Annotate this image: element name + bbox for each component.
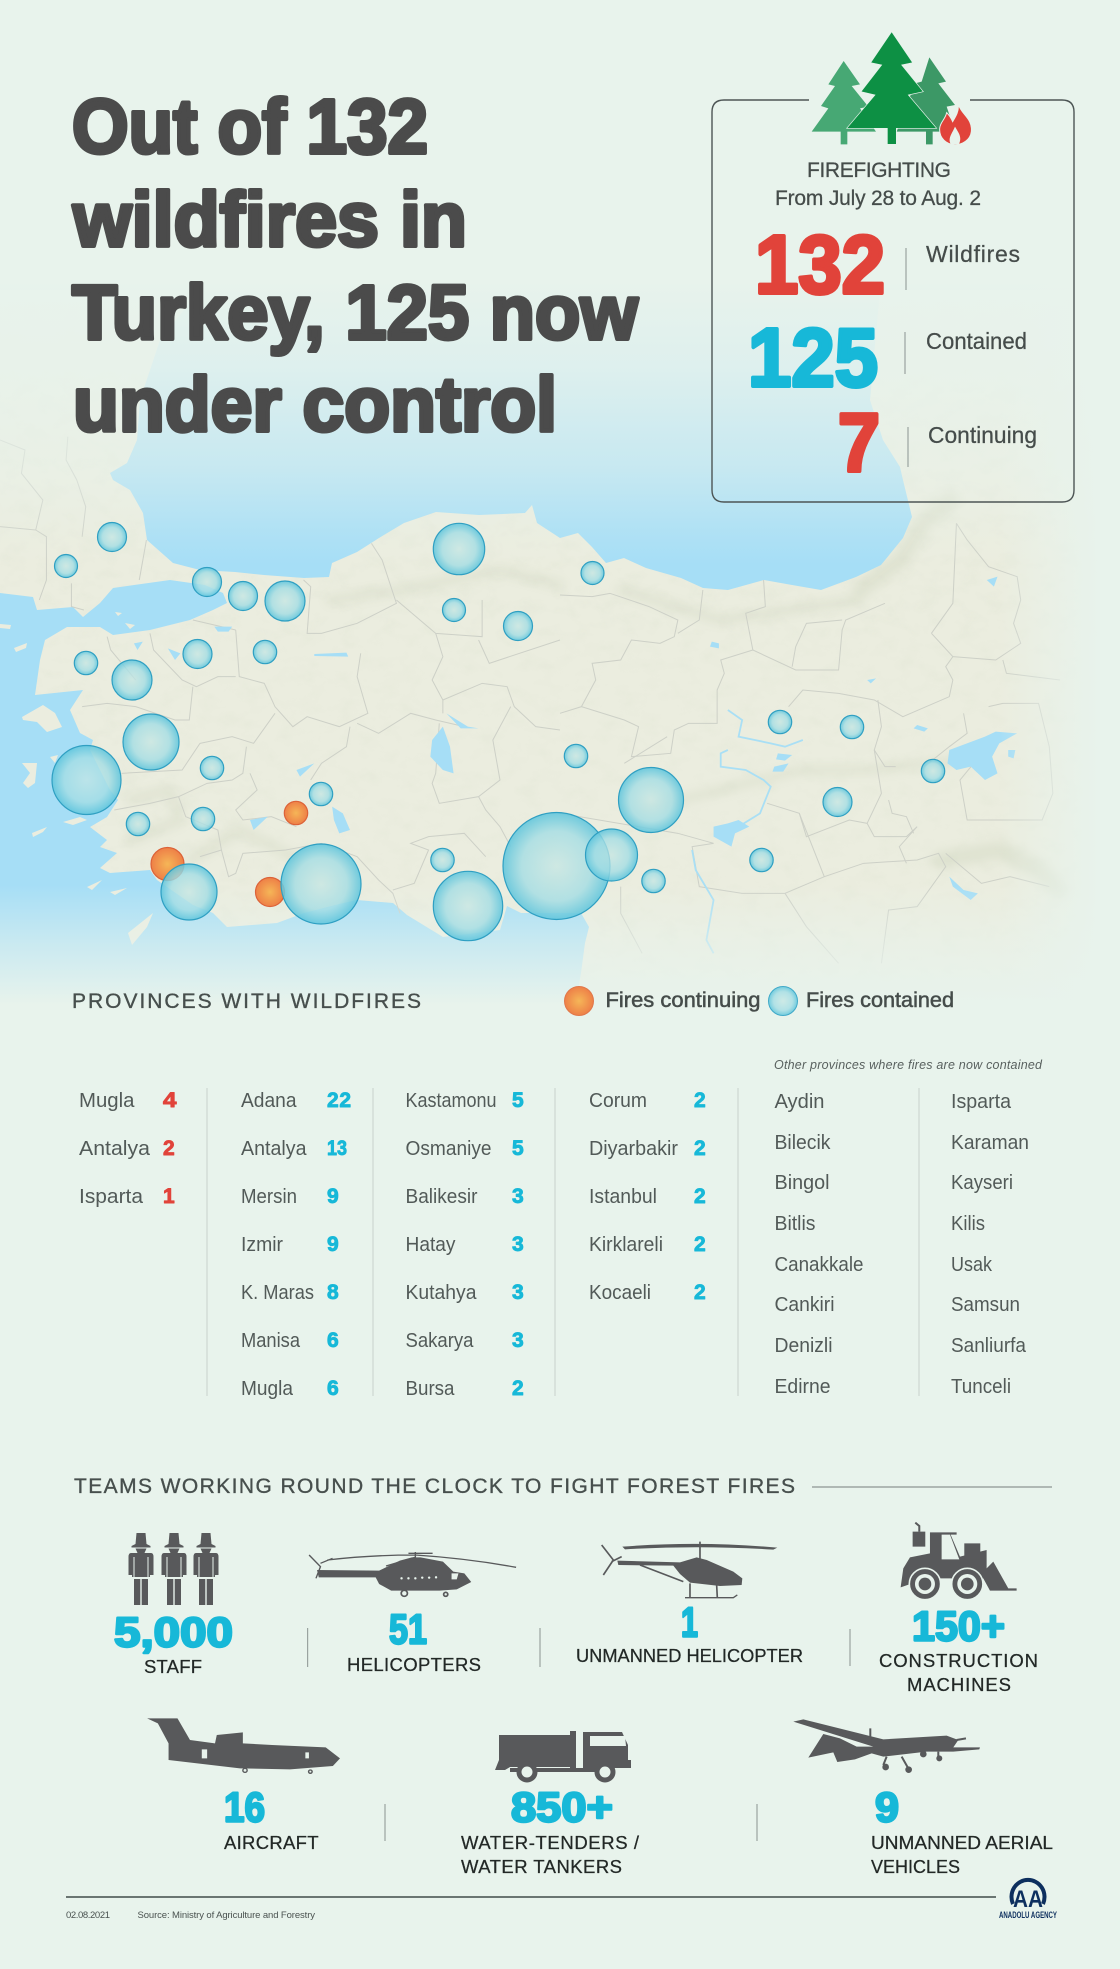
- list: contained, column one: Mugla: [241, 1377, 294, 1400]
- list: other provinces, left: Canakkale: [774, 1253, 864, 1276]
- stat: construction machines: 150+: [912, 1602, 1005, 1650]
- list: contained, column two: Bursa: [406, 1377, 455, 1400]
- title: wildfires in: [72, 177, 467, 263]
- list: contained, column two: 5: [512, 1137, 524, 1160]
- icon: firefighters: [128, 1533, 218, 1605]
- note: other provinces: Other provinces where fires are now contained: [774, 1058, 1043, 1072]
- list: fires continuing by province: [79, 1089, 177, 1208]
- list: contained, column three: Kocaeli: [589, 1281, 651, 1304]
- stat: aircraft: AIRCRAFT: [224, 1832, 319, 1853]
- list: contained, column one: 8: [327, 1281, 339, 1304]
- stat: unmanned helicopter: UNMANNED HELICOPTER: [576, 1645, 803, 1666]
- stat: 132 wildfires: Wildfires: [926, 241, 1020, 267]
- list: other provinces, right: Sanliurfa: [951, 1334, 1027, 1357]
- terrain texture: [127, 499, 1041, 874]
- icon: water tanker truck: [495, 1731, 631, 1780]
- list: contained, column one: 9: [327, 1185, 339, 1208]
- list: contained, column two: Osmaniye: [406, 1137, 492, 1160]
- list: other provinces, left: Denizli: [774, 1334, 832, 1357]
- list: contained, column three: 2: [694, 1233, 706, 1256]
- list: other provinces, right: Kilis: [951, 1212, 985, 1235]
- stat: water tankers: WATER TANKERS: [461, 1856, 622, 1877]
- stat: water tankers: 850+: [511, 1784, 613, 1830]
- stat: 7 continuing: Continuing: [928, 422, 1037, 448]
- stat: 125 contained: [748, 311, 1027, 404]
- list: contained, column two: 2: [512, 1377, 524, 1400]
- western province borders: [0, 437, 560, 913]
- list: contained, column three: Kirklareli: [589, 1233, 663, 1256]
- icon: helicopter: [309, 1552, 516, 1596]
- list: contained, column one: 22: [327, 1089, 351, 1112]
- list: contained, column two: 3: [512, 1329, 524, 1352]
- logo: Anadolu Agency: ANADOLU AGENCY: [999, 1910, 1057, 1921]
- list: contained, column two: Balikesir: [406, 1185, 478, 1208]
- list: contained, column one: Manisa: [241, 1329, 301, 1352]
- sea: [0, 280, 1120, 1010]
- stat: staff: STAFF: [144, 1656, 202, 1677]
- list: contained, column two: [406, 1089, 524, 1400]
- list: contained, column two: Kutahya: [406, 1281, 477, 1304]
- list: other provinces, left: Edirne: [774, 1375, 830, 1398]
- list: contained, column three: 2: [694, 1281, 706, 1304]
- list: fires continuing by province: Isparta: [79, 1185, 144, 1208]
- panel: firefighting summary: [712, 32, 1074, 502]
- list: other provinces, right: Samsun: [951, 1293, 1020, 1316]
- panel heading: FIREFIGHTING: [807, 159, 951, 182]
- icon: drone: [793, 1719, 980, 1773]
- eastern province borders: [560, 523, 1060, 963]
- legend: Fires continuing: [606, 989, 760, 1012]
- stat: unmanned aerial vehicles: VEHICLES: [871, 1856, 960, 1877]
- list: contained, column two: Sakarya: [406, 1329, 474, 1352]
- list: fires continuing by province: Antalya: [79, 1137, 151, 1160]
- orange bubbles: fires continuing: [151, 801, 308, 906]
- stat: 125 contained: 125: [748, 311, 878, 404]
- list: contained, column three: Istanbul: [589, 1185, 657, 1208]
- list: contained, column three: [589, 1089, 706, 1304]
- stat: 125 contained: Contained: [926, 328, 1027, 354]
- panel date range: From July 28 to Aug. 2: [775, 187, 981, 210]
- icon: trees with flame: [812, 32, 971, 145]
- title: Out of 132: [72, 84, 428, 170]
- list: other provinces, right: [951, 1090, 1029, 1398]
- list: other provinces, left: [774, 1090, 864, 1398]
- list: contained, column two: 3: [512, 1281, 524, 1304]
- list: fires continuing by province: 4: [163, 1089, 177, 1112]
- list: contained, column one: Mersin: [241, 1185, 297, 1208]
- stat: helicopters: 51: [389, 1606, 427, 1652]
- footer source: Source: Ministry of Agriculture and Forestry: [138, 1910, 315, 1921]
- stat: unmanned helicopter: 1: [681, 1598, 698, 1646]
- list: contained, column one: Antalya: [241, 1137, 307, 1160]
- list: contained, column three: Corum: [589, 1089, 647, 1112]
- list: contained, column two: Kastamonu: [406, 1089, 496, 1112]
- title: [72, 84, 639, 448]
- stat: helicopters: [309, 1552, 516, 1675]
- stat: construction machines: MACHINES: [907, 1674, 1011, 1695]
- page fade overlays: [0, 280, 1120, 1010]
- list: contained, column two: 3: [512, 1233, 524, 1256]
- stat: staff: [114, 1533, 233, 1677]
- list: contained, column three: 2: [694, 1089, 706, 1112]
- list: contained, column three: 2: [694, 1137, 706, 1160]
- list: other provinces, right: Tunceli: [951, 1375, 1011, 1398]
- icon: aircraft: [147, 1718, 340, 1773]
- legend: Fires contained: [806, 989, 954, 1012]
- list: other provinces, left: Bilecik: [774, 1131, 831, 1154]
- legend: [564, 986, 954, 1016]
- stat: 7 continuing: 7: [838, 396, 880, 489]
- stat: aircraft: 16: [224, 1784, 265, 1830]
- stat: 132 wildfires: 132: [755, 218, 885, 311]
- list: contained, column one: K. Maras: [241, 1281, 314, 1304]
- list: other provinces, left: Bingol: [774, 1171, 830, 1194]
- stat: aircraft: [147, 1718, 340, 1853]
- icon: wheel loader: [901, 1523, 1017, 1600]
- list: fires continuing by province: 1: [163, 1185, 175, 1208]
- landmass: [0, 290, 1120, 1008]
- stat: unmanned aerial vehicles: UNMANNED AERIAL: [871, 1832, 1053, 1853]
- list: contained, column three: Diyarbakir: [589, 1137, 678, 1160]
- stat: construction machines: CONSTRUCTION: [879, 1650, 1038, 1671]
- icon: unmanned helicopter: [602, 1542, 777, 1598]
- list: contained, column one: 9: [327, 1233, 339, 1256]
- list: contained, column three: 2: [694, 1185, 706, 1208]
- title: Turkey, 125 now: [72, 270, 639, 356]
- footer rule: [66, 1896, 996, 1898]
- heading: teams: TEAMS WORKING ROUND THE CLOCK TO FIGHT FOREST FIRES: [74, 1475, 795, 1498]
- stat: water tankers: [461, 1731, 640, 1877]
- list: contained, column two: 3: [512, 1185, 524, 1208]
- list: fires continuing by province: 2: [163, 1137, 175, 1160]
- stat: 132 wildfires: [755, 218, 1020, 311]
- list: other provinces, left: Cankiri: [774, 1293, 834, 1316]
- list: contained, column two: 5: [512, 1089, 524, 1112]
- heading: provinces with wildfires: PROVINCES WITH WILDFIRES: [72, 990, 421, 1013]
- stat: construction machines: [879, 1523, 1038, 1695]
- panel outline: [712, 100, 1074, 502]
- list: other provinces, left: Aydin: [774, 1090, 824, 1113]
- list: contained, column one: 6: [327, 1377, 339, 1400]
- list: contained, column one: Adana: [241, 1089, 297, 1112]
- list: other provinces, right: Isparta: [951, 1090, 1012, 1113]
- list dividers: [207, 1088, 919, 1396]
- list: contained, column one: 13: [327, 1137, 347, 1160]
- list: contained, column one: [241, 1089, 351, 1400]
- stat: unmanned aerial vehicles: [793, 1719, 1053, 1877]
- list: contained, column one: 6: [327, 1329, 339, 1352]
- list: contained, column two: Hatay: [406, 1233, 456, 1256]
- list: other provinces, right: Usak: [951, 1253, 993, 1276]
- list: other provinces, right: Karaman: [951, 1131, 1029, 1154]
- list: other provinces, right: Kayseri: [951, 1171, 1013, 1194]
- list: other provinces, left: Bitlis: [774, 1212, 816, 1235]
- map of Turkey with wildfire bubbles: [0, 350, 1065, 988]
- list: fires continuing by province: Mugla: [79, 1089, 135, 1112]
- stat: 7 continuing: [838, 396, 1037, 489]
- stat: helicopters: HELICOPTERS: [347, 1654, 481, 1675]
- stat: unmanned helicopter: [576, 1542, 803, 1666]
- logo: Anadolu Agency: [999, 1880, 1057, 1921]
- stat: unmanned aerial vehicles: 9: [875, 1784, 899, 1830]
- stat: staff: 5,000: [114, 1608, 233, 1656]
- logo: Anadolu Agency: AA: [1013, 1886, 1043, 1913]
- title: under control: [73, 362, 557, 448]
- blue bubbles: fires contained: [52, 522, 945, 941]
- footer date: 02.08.2021: [66, 1910, 110, 1921]
- list: contained, column one: Izmir: [241, 1233, 283, 1256]
- western lakes: [134, 627, 479, 833]
- stat: water tankers: WATER-TENDERS /: [461, 1832, 640, 1853]
